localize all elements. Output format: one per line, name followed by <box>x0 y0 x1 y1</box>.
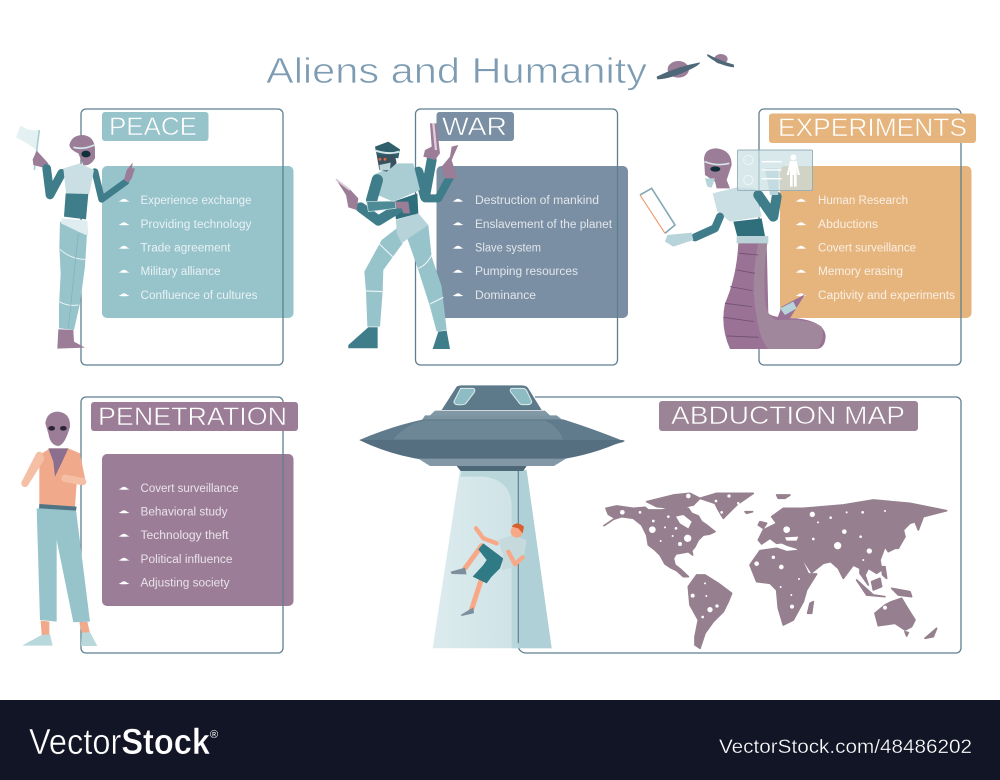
abduction map frame <box>518 397 961 653</box>
experiments list: Captivity and experiments <box>818 290 955 302</box>
peace list: Military alliance <box>140 266 220 278</box>
saucer <box>359 385 625 471</box>
footer logo: VectorStock <box>29 721 211 762</box>
panel: war <box>336 109 628 365</box>
penetration list: Political influence <box>140 554 232 566</box>
war list box <box>436 166 628 318</box>
experiments list <box>796 195 955 302</box>
war list: Enslavement of the planet <box>475 219 613 231</box>
penetration heading: PENETRATION <box>98 403 287 431</box>
penetration frame <box>81 397 283 653</box>
penetration list: Technology theft <box>140 530 229 542</box>
panel: abduction map <box>359 385 961 653</box>
world map <box>604 493 947 648</box>
war list: Dominance <box>475 290 536 302</box>
peace list <box>118 195 258 302</box>
penetration list box <box>102 454 294 606</box>
experiments list box <box>780 166 972 318</box>
abduction map heading: ABDUCTION MAP <box>671 402 905 430</box>
icon: flying saucers <box>657 54 734 79</box>
abducted man <box>451 523 527 616</box>
figure: serpent alien with saw and screen <box>640 148 826 349</box>
panel: penetration <box>23 397 298 653</box>
illustration: UFO abducting a man <box>359 385 625 648</box>
experiments frame <box>759 109 961 365</box>
penetration list: Covert surveillance <box>140 483 238 495</box>
figure: alien with white flag <box>16 125 135 349</box>
penetration list: Behavioral study <box>140 506 228 518</box>
peace list box <box>102 166 294 318</box>
war list <box>452 195 613 302</box>
light beam <box>433 470 552 648</box>
title: Aliens and Humanity <box>266 50 647 91</box>
experiments list: Memory erasing <box>818 266 903 278</box>
peace list: Trade agreement <box>140 242 231 254</box>
war frame <box>416 109 618 365</box>
panel: peace <box>16 109 293 365</box>
peace list: Confluence of cultures <box>140 290 258 302</box>
war list: Slave system <box>475 242 541 254</box>
figure: disguised alien <box>23 412 97 646</box>
footer image id: VectorStock.com/48486202 <box>719 737 972 758</box>
penetration list: Adjusting society <box>140 578 230 590</box>
experiments heading: EXPERIMENTS <box>778 114 967 142</box>
peace list: Providing technology <box>140 219 252 231</box>
experiments list: Covert surveillance <box>818 242 916 254</box>
penetration list <box>118 483 238 590</box>
war list: Pumping resources <box>475 266 578 278</box>
experiments list: Human Research <box>818 195 908 207</box>
experiments list: Abductions <box>818 219 878 231</box>
panel: experiments <box>640 109 976 365</box>
registered mark: ® <box>210 729 218 741</box>
footer bar <box>0 700 1000 780</box>
peace heading: PEACE <box>109 113 197 141</box>
war heading: WAR <box>442 113 507 141</box>
war list: Destruction of mankind <box>475 195 599 207</box>
peace list: Experience exchange <box>140 195 252 207</box>
figure: armed alien soldier <box>336 123 458 349</box>
peace frame <box>81 109 283 365</box>
